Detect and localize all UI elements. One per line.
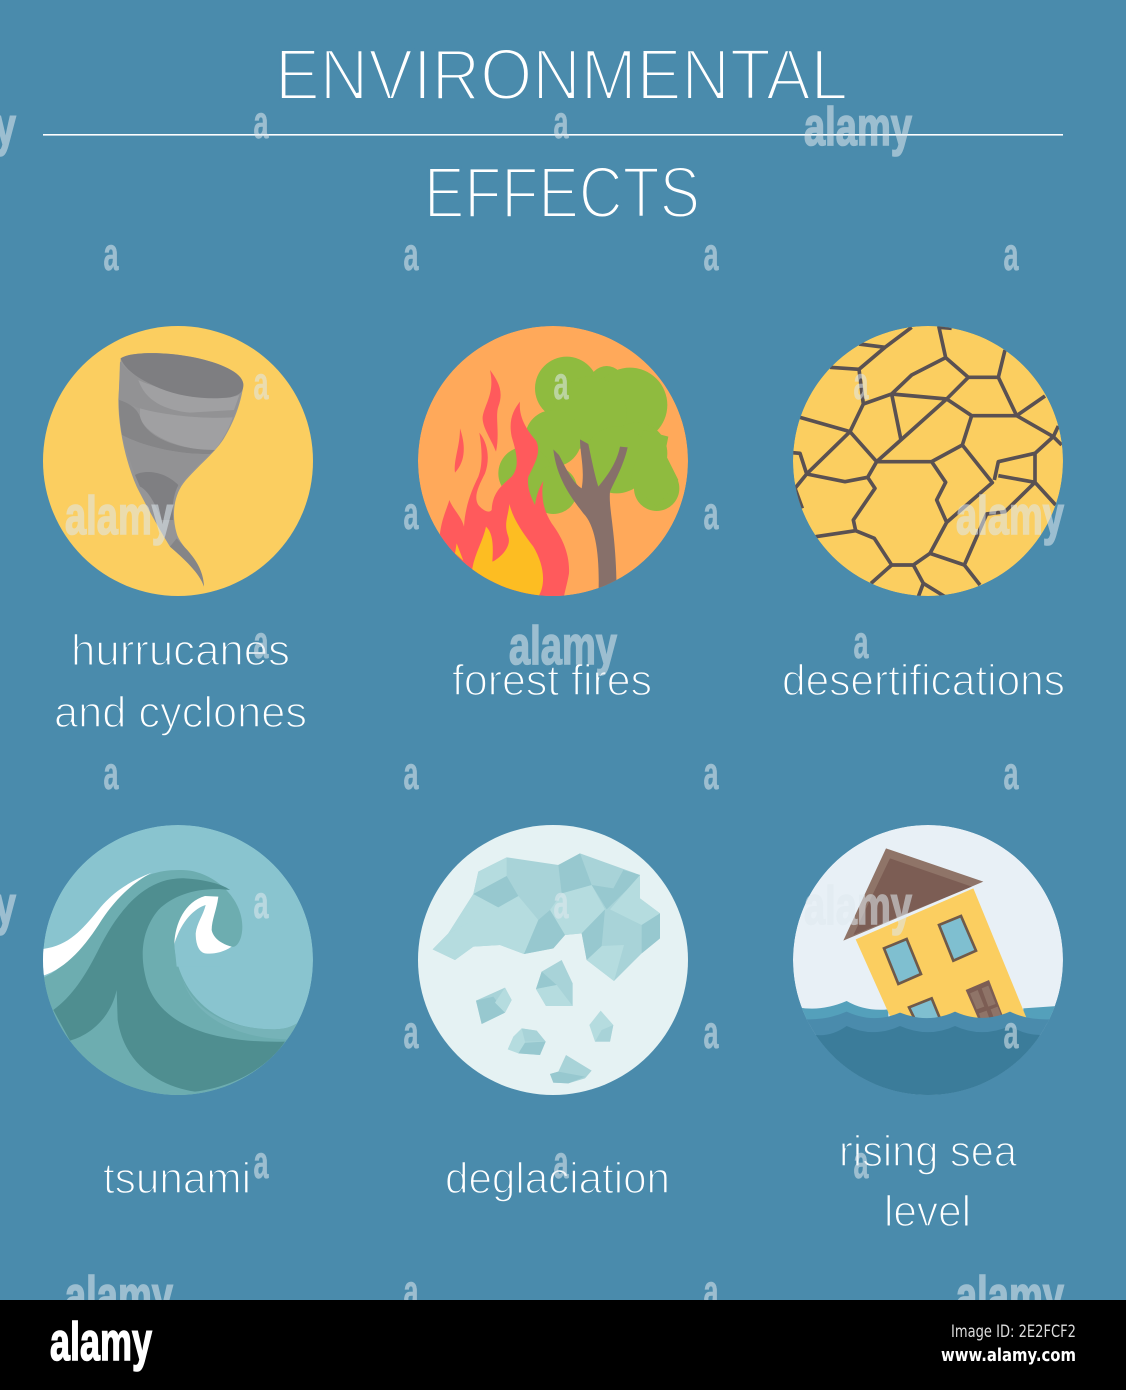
label: deglaciation: deglaciation	[445, 1154, 670, 1203]
title: environmental effects: EFFECTS	[424, 154, 700, 234]
stock watermarks: a	[704, 487, 719, 539]
stock watermarks: a	[254, 96, 269, 148]
footer bar	[0, 1300, 1126, 1390]
stock watermarks: a	[854, 357, 869, 409]
stock watermarks: a	[704, 228, 719, 280]
website: www.alamy.com	[941, 1345, 1076, 1366]
icon: tsunami wave	[43, 825, 313, 1095]
title: environmental effects	[43, 36, 1063, 234]
stock watermarks: alamy	[65, 486, 173, 546]
icon: tornado on yellow circle	[43, 326, 313, 596]
label: rising sea level: level	[884, 1187, 971, 1236]
label: tsunami: tsunami	[103, 1154, 251, 1203]
stock watermarks: a	[404, 1006, 419, 1058]
stock watermarks: a	[554, 876, 569, 928]
label: hurrucanes and cyclones	[54, 626, 307, 737]
footer logo: alamy	[50, 1312, 152, 1372]
stock watermarks: alamy	[804, 97, 912, 157]
stock watermarks: a	[554, 96, 569, 148]
stock watermarks: a	[254, 357, 269, 409]
label: hurrucanes and cyclones: hurrucanes	[71, 626, 290, 675]
stock watermarks: a	[854, 1136, 869, 1188]
stock watermarks: a	[254, 1136, 269, 1188]
stock watermarks: a	[1004, 747, 1019, 799]
icon: melting glacier	[418, 825, 688, 1095]
stock watermarks: alamy	[804, 876, 912, 936]
tree trunk	[553, 439, 628, 597]
stock watermarks: a	[704, 1006, 719, 1058]
stock watermarks: a	[404, 487, 419, 539]
ice fragments	[476, 960, 613, 1083]
image id: Image ID: 2E2FCF2	[951, 1322, 1076, 1342]
stock watermarks: a	[404, 1265, 419, 1317]
stock watermarks: a	[404, 747, 419, 799]
title: environmental effects: ENVIRONMENTAL	[275, 36, 848, 116]
stock watermarks: a	[854, 616, 869, 668]
icon: forest fire on orange circle	[418, 326, 688, 600]
stock watermarks: a	[254, 876, 269, 928]
stock watermarks: alamy	[509, 616, 617, 676]
stock watermarks: alamy	[956, 1266, 1064, 1326]
label: desertifications: desertifications	[782, 656, 1065, 705]
stock watermarks: a	[254, 616, 269, 668]
label: forest fires: forest fires	[452, 656, 652, 705]
stock watermarks: a	[554, 357, 569, 409]
stock watermarks: a	[1004, 1006, 1019, 1058]
stock watermarks: alamy	[956, 486, 1064, 546]
stock watermarks: a	[104, 228, 119, 280]
stock watermarks: alamy	[65, 1266, 173, 1326]
icon: cracked desert ground	[792, 326, 1063, 597]
flames	[439, 402, 569, 600]
stock watermarks: a	[554, 1136, 569, 1188]
stock watermarks: a	[404, 228, 419, 280]
stock watermarks: a	[1004, 228, 1019, 280]
label: hurrucanes and cyclones: and cyclones	[54, 688, 307, 737]
label: rising sea level	[839, 1127, 1017, 1236]
icon: flooded house	[785, 825, 1072, 1107]
label: rising sea level: rising sea	[839, 1127, 1017, 1176]
flood water	[807, 1012, 1049, 1095]
stock watermarks: a	[704, 747, 719, 799]
stock watermarks: a	[104, 747, 119, 799]
tree foliage	[498, 357, 679, 514]
stock watermarks: a	[704, 1265, 719, 1317]
